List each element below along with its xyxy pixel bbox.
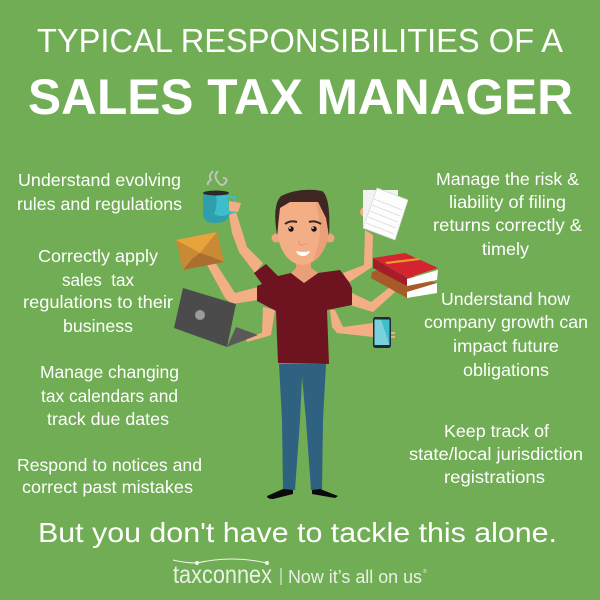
text: manage risk: Manage the risk &: [436, 169, 579, 189]
text: notices: [17, 455, 202, 497]
text: company growth: [424, 289, 588, 380]
text: tax calendars: [40, 362, 179, 429]
eyes and brows: [285, 221, 321, 232]
nose: [299, 241, 307, 245]
hair: [275, 190, 329, 236]
text: tax calendars: tax calendars and: [41, 386, 178, 406]
shirt: [254, 264, 352, 364]
text: apply regulations: Correctly apply: [38, 246, 158, 266]
text: registrations: state/local jurisdiction: [409, 444, 583, 464]
text: registrations: [409, 421, 583, 487]
icon: papers: [363, 188, 408, 240]
text: registrations: Keep track of: [444, 421, 549, 441]
text: manage risk: timely: [482, 239, 529, 259]
neck: [291, 256, 318, 283]
text: apply regulations: [23, 246, 173, 336]
legs: [279, 364, 326, 490]
closing message: But you don't have to tackle this alone.: [38, 517, 557, 548]
text: registrations: registrations: [444, 467, 545, 487]
shoes: [267, 489, 338, 499]
text: company growth: obligations: [463, 360, 549, 380]
text: tax calendars: Manage changing: [40, 362, 179, 382]
icon: books: [371, 253, 438, 298]
text: company growth: company growth can: [424, 312, 588, 332]
face: [278, 198, 328, 265]
title: TYPICAL RESPONSIBILITIES OF A: [37, 22, 563, 59]
logo: taxconnex: Now it’s all on us: [288, 567, 422, 587]
text: manage risk: returns correctly &: [433, 215, 582, 235]
text: manage risk: [433, 169, 582, 259]
logo: taxconnex: taxconnex: [173, 561, 272, 589]
icon: phone: [373, 317, 395, 348]
text: understand rules: [17, 170, 182, 214]
face shading: [313, 202, 328, 261]
icon: coffee mug: [203, 171, 241, 223]
text: apply regulations: business: [63, 316, 133, 336]
text: understand rules: Understand evolving: [18, 170, 181, 190]
text: company growth: impact future: [453, 336, 559, 356]
text: company growth: Understand how: [441, 289, 571, 309]
text: apply regulations: regulations to their: [23, 292, 173, 312]
text: tax calendars: track due dates: [47, 409, 169, 429]
illustration: multitasking manager: [174, 171, 438, 499]
ears: [272, 234, 280, 242]
logo: taxconnex: [173, 559, 427, 589]
icon: envelope: [176, 232, 224, 270]
text: notices: Respond to notices and: [17, 455, 202, 475]
text: understand rules: rules and regulations: [17, 194, 182, 214]
text: notices: correct past mistakes: [22, 477, 193, 497]
logo: taxconnex: ®: [423, 568, 427, 575]
text: apply regulations: sales tax: [62, 270, 134, 290]
icon: laptop: [174, 288, 258, 347]
smile: [296, 251, 310, 256]
text: manage risk: liability of filing: [449, 192, 566, 212]
arms: [207, 207, 395, 342]
title: [28, 22, 573, 125]
title: SALES TAX MANAGER: [28, 69, 573, 125]
